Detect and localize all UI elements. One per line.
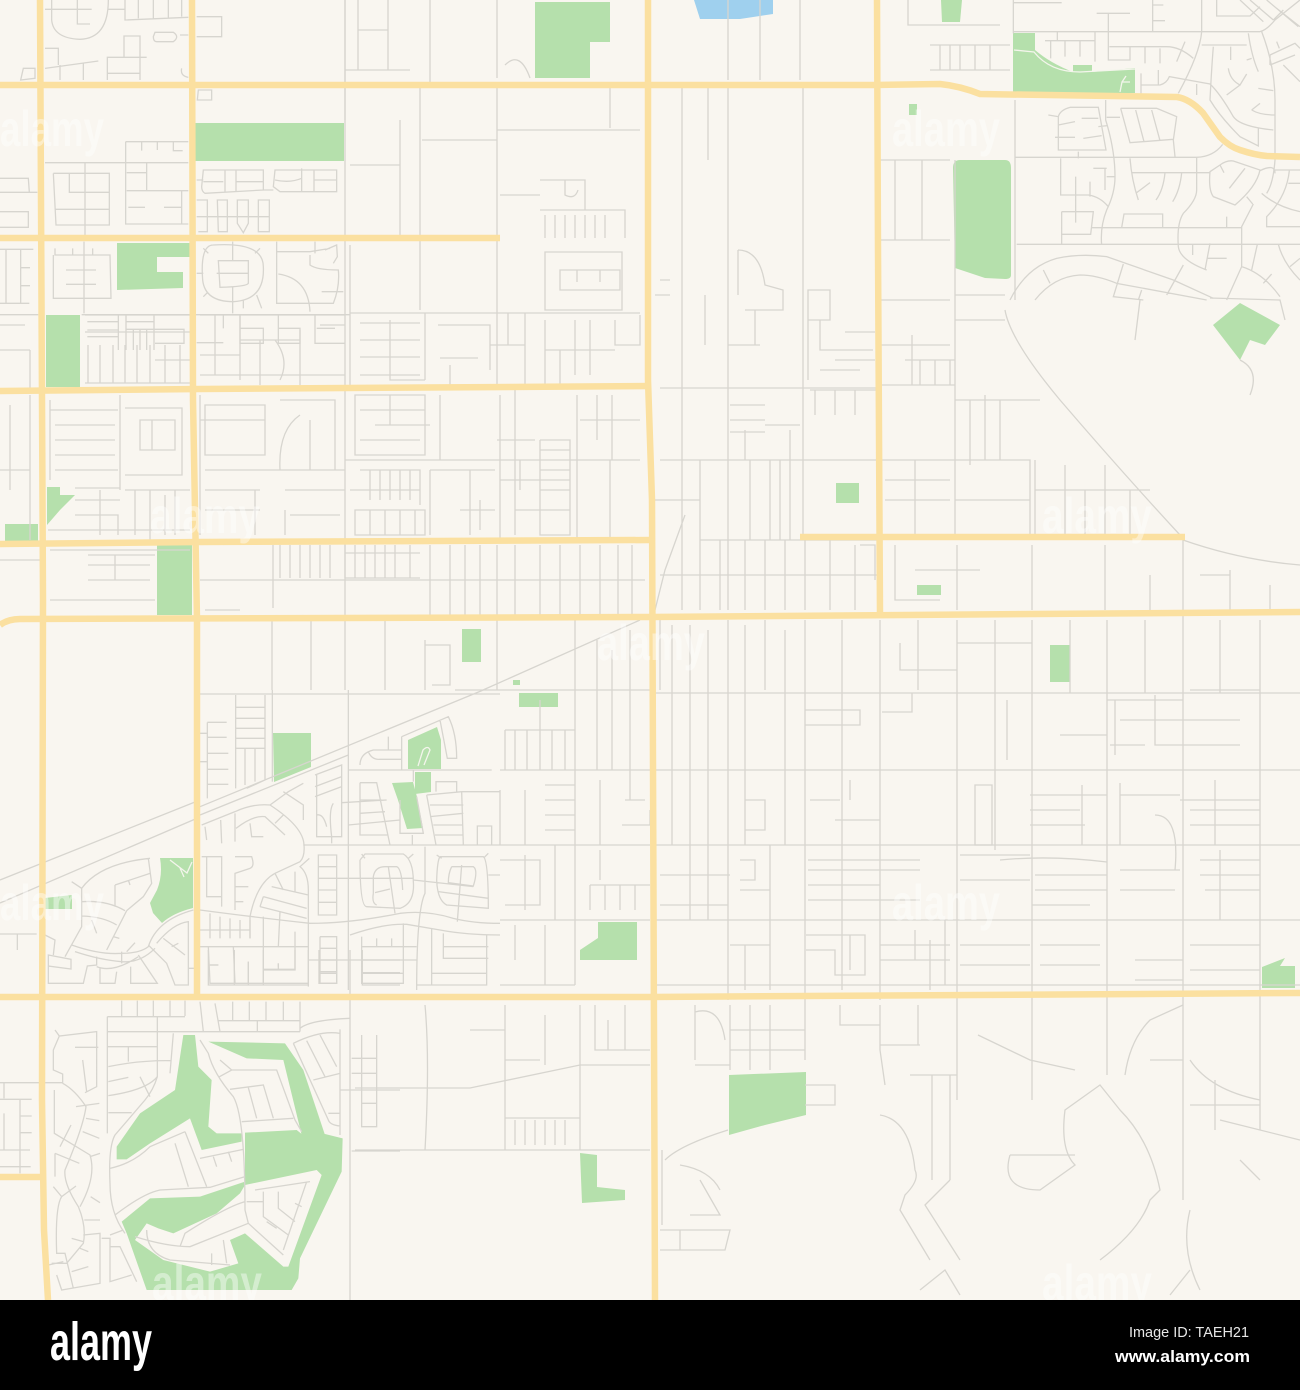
watermarks: alamy: alamy bbox=[1042, 488, 1152, 544]
streets: central north bbox=[345, 85, 640, 620]
park: golf course bbox=[117, 1035, 343, 1290]
watermarks: alamy: alamy bbox=[0, 101, 104, 157]
watermarks: alamy: alamy bbox=[892, 875, 1000, 931]
watermarks: alamy bbox=[0, 101, 1152, 1311]
park detail: white paths inside parks bbox=[170, 50, 1135, 877]
streets: central east bbox=[655, 85, 880, 610]
streets: top band bbox=[345, 0, 1010, 120]
watermarks: alamy: alamy bbox=[0, 875, 104, 931]
streets and railway: south-west blocks bbox=[0, 620, 650, 920]
streets: far west blocks bbox=[0, 315, 345, 540]
streets: central west blocks bbox=[200, 390, 640, 540]
watermarks: alamy: alamy bbox=[597, 615, 705, 671]
minor roads: central south-west neighbourhood bbox=[200, 690, 500, 990]
footer bar bbox=[0, 1300, 1300, 1390]
minor roads: south-west quarter and golf estate bbox=[0, 950, 400, 1300]
streets: south-east grid bbox=[655, 610, 1300, 1200]
footer image id: Image ID: TAEH21 bbox=[1129, 1324, 1249, 1341]
minor roads: north-east neighbourhood bbox=[1010, 0, 1300, 300]
minor roads: west neighbourhood by the park bbox=[0, 858, 194, 985]
streets: band above main road bbox=[0, 545, 645, 615]
streets: north-east suburbs bbox=[880, 160, 1300, 610]
watermarks: alamy: alamy bbox=[152, 1255, 262, 1311]
watermarks: alamy: alamy bbox=[1042, 1255, 1152, 1311]
streets: south of the lower main road bbox=[355, 1005, 1300, 1250]
footer url: www.alamy.com bbox=[1114, 1347, 1250, 1366]
footer logo: alamy: alamy bbox=[50, 1312, 152, 1372]
water: lake at top bbox=[694, 0, 773, 19]
minor roads: north-west quarter bbox=[0, 0, 350, 350]
watermarks: alamy: alamy bbox=[892, 101, 1000, 157]
watermarks: alamy: alamy bbox=[150, 488, 260, 544]
